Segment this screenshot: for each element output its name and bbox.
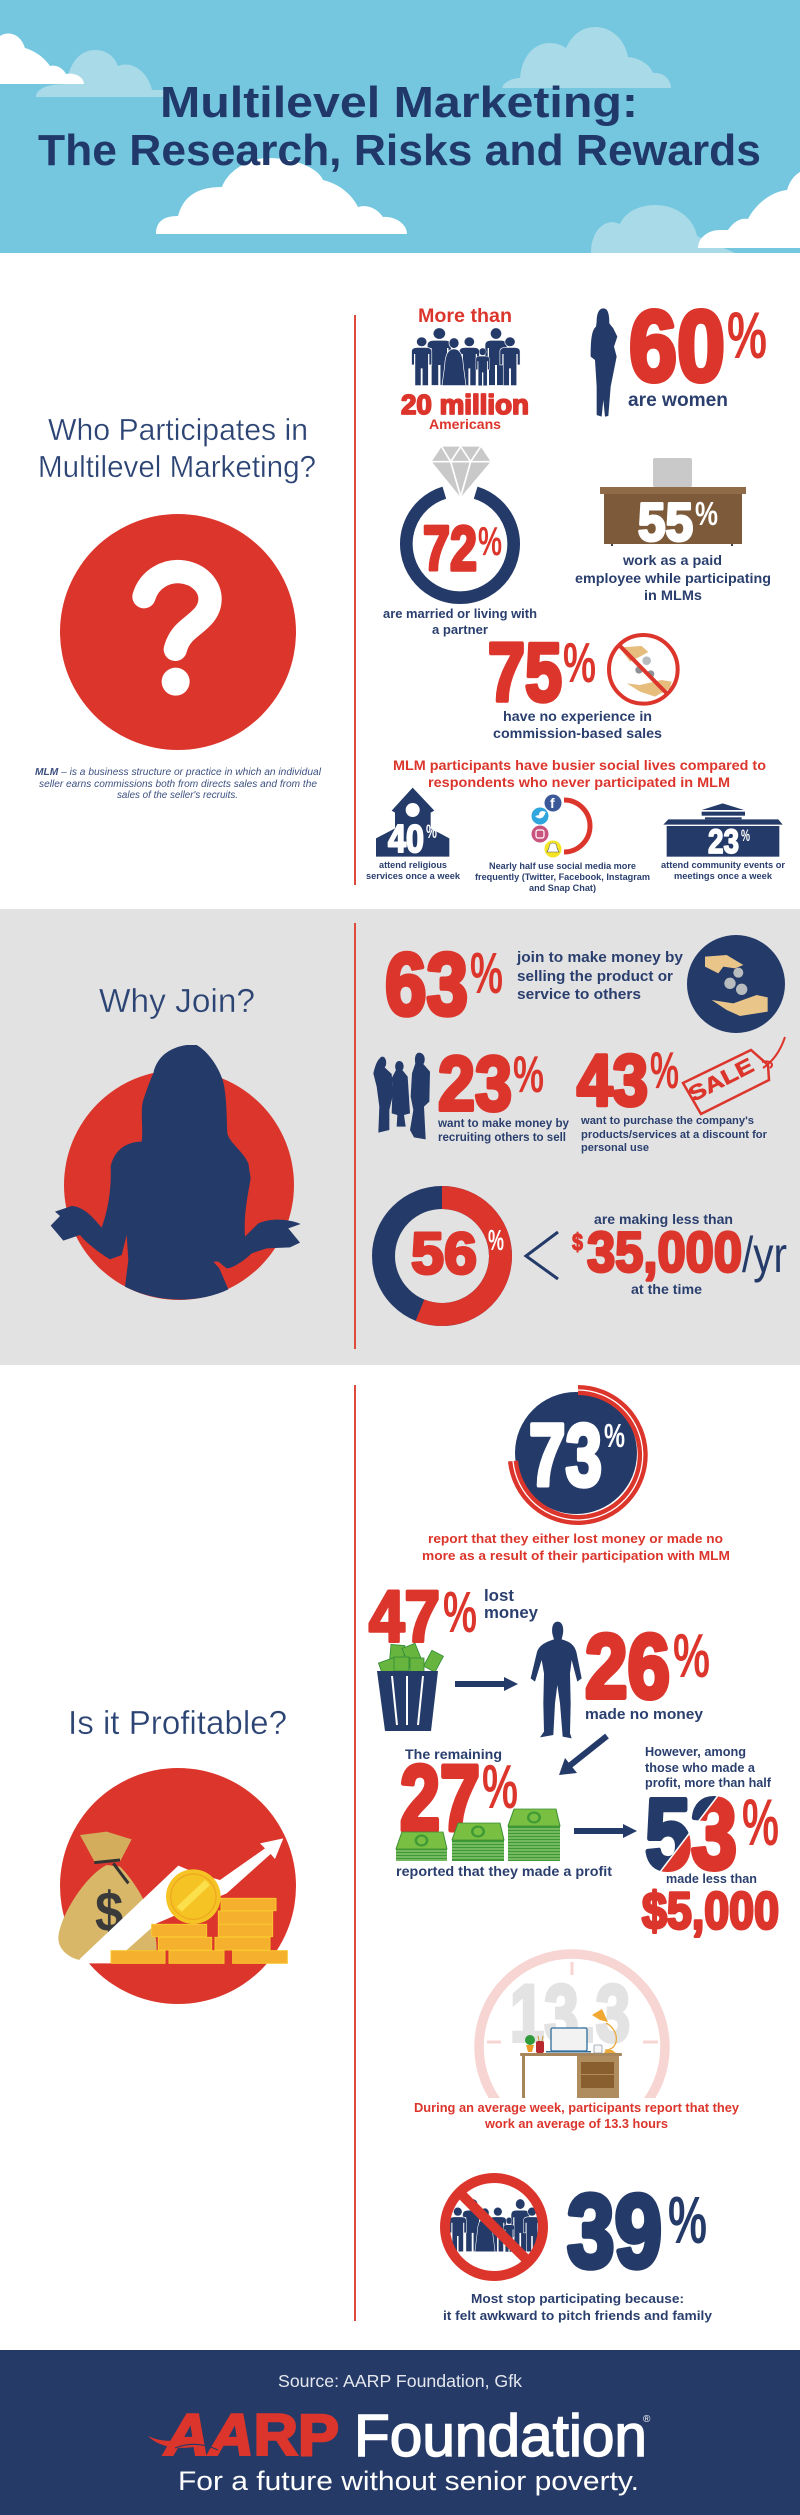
icon: diamond ring — [406, 447, 514, 598]
stat: 43% discount: products/services at a discount for — [581, 1129, 768, 1141]
stat: 60% women: % — [727, 298, 767, 372]
panel: who participates — [35, 290, 786, 893]
stat: 43% discount: % — [650, 1042, 679, 1100]
stat: 75% no experience: commission-based sales — [493, 725, 662, 741]
stat: 72% married: % — [478, 518, 502, 564]
stat: 73% lost money: more as a result of their participation with MLM — [422, 1548, 730, 1563]
icon: sale tag: SALE — [685, 1054, 758, 1106]
panel: header — [0, 0, 800, 253]
stat: 26% made no money: made no money — [585, 1706, 704, 1723]
arrow — [455, 1677, 518, 1691]
logo: AARP Foundation: AARP — [163, 2403, 339, 2468]
stat: 39% felt awkward: % — [668, 2183, 707, 2258]
subheading: busier social lives: respondents who never participated in MLM — [428, 775, 730, 790]
icon: no family group — [445, 2178, 543, 2276]
stat: social media use: and Snap Chat) — [529, 883, 596, 893]
stat: 23% recruiting: want to make money by — [437, 1116, 569, 1130]
stat: 43% discount — [577, 1037, 785, 1154]
icon: social media arc: f — [550, 795, 555, 811]
stat: 23% community events: attend community events or — [661, 860, 786, 870]
divider line — [354, 315, 356, 885]
stat: 75% no experience: have no experience in — [503, 708, 652, 724]
stat: 53% made less than $5,000: made less than — [666, 1871, 757, 1886]
stat: 27% made a profit: reported that they made a profit — [396, 1863, 612, 1879]
stat: 55% paid employee: employee while participating — [575, 571, 771, 586]
stat: 63% sell product: % — [470, 941, 503, 1006]
stat: 72% married: are married or living with — [383, 607, 537, 621]
heading: who participates: Multilevel Marketing? — [38, 449, 316, 484]
stat: 75% no experience: % — [563, 631, 596, 695]
heading: who participates: Who Participates in — [48, 412, 308, 447]
icon: social media arc — [532, 794, 590, 858]
stat: 63% sell product: 63 — [385, 935, 468, 1034]
title — [38, 78, 761, 175]
stat: 43% discount: want to purchase the company's — [580, 1115, 754, 1127]
icon: woman silhouette — [591, 308, 617, 417]
stat: 73% lost money — [422, 1390, 730, 1563]
stat: 63% sell product: selling the product or — [517, 968, 673, 985]
stat: social media use — [475, 794, 650, 893]
stat: 56% under $35,000: % — [488, 1225, 504, 1257]
stat: 20 million Americans: 20 million — [401, 389, 529, 420]
heading: who participates — [38, 412, 316, 484]
stat: 55% paid employee: 55 — [638, 494, 693, 552]
title: The Research, Risks and Rewards — [38, 126, 761, 175]
stat: 55% paid employee: work as a paid — [622, 553, 722, 568]
stat: 23% community events: 23 — [708, 823, 739, 861]
stat: 75% no experience: 75 — [488, 626, 562, 719]
stat: 39% felt awkward: it felt awkward to pitch friends and family — [443, 2308, 713, 2323]
logo: AARP Foundation: Foundation — [354, 2403, 647, 2469]
stat: 43% discount: personal use — [581, 1142, 649, 1154]
stat: 39% felt awkward — [443, 2173, 713, 2323]
stat: 63% sell product: join to make money by — [516, 949, 684, 966]
stat: 55% paid employee — [575, 458, 771, 603]
definition: MLM: MLM – is a business structure or practice in which an individual — [35, 767, 322, 778]
stat: 20 million Americans: Americans — [429, 416, 501, 432]
logo: AARP Foundation — [148, 2403, 651, 2469]
stat: 72% married — [383, 447, 537, 637]
stat: 40% religious services: 40 — [388, 818, 424, 861]
stat: 56% under $35,000: are making less than — [594, 1212, 733, 1227]
stat: 60% women: 60 — [629, 290, 725, 402]
title: Multilevel Marketing: — [160, 78, 638, 127]
icon: money bag, coins and rising arrow: $ — [95, 1882, 123, 1945]
icon: community building — [663, 803, 783, 857]
definition: MLM: sales of the seller's recruits. — [117, 790, 238, 801]
stat: 40% religious services: services once a week — [366, 871, 461, 881]
stat: 72% married: 72 — [423, 514, 477, 584]
icon: money bag, coins and rising arrow — [58, 1768, 296, 2004]
stat: 53% made less than $5,000: 53 — [645, 1778, 737, 1890]
icon: three people silhouettes — [373, 1053, 430, 1139]
stat: 47% lost money: 47 — [369, 1577, 440, 1657]
icon: question mark circle — [60, 514, 296, 750]
arrow — [574, 1824, 637, 1838]
divider line — [354, 923, 356, 1349]
icon: desk with laptop — [600, 458, 746, 546]
stat: 20 million Americans — [401, 305, 529, 432]
stat: 56% under $35,000: $ — [572, 1229, 584, 1256]
stat: 53% made less than $5,000: % — [742, 1785, 779, 1859]
icon: hands and coins — [687, 935, 785, 1033]
stat: 47% lost money: lost — [484, 1586, 514, 1605]
tagline: For a future without senior poverty. — [178, 2466, 639, 2496]
stat: 23% recruiting: recruiting others to sell — [438, 1130, 566, 1144]
stat: 27% made a profit: The remaining — [405, 1746, 502, 1762]
stat: 13.3 hours: During an average week, participants report that they — [414, 2101, 739, 2115]
stat: 23% recruiting — [373, 1041, 569, 1144]
chart: donut 56 percent — [384, 1198, 501, 1314]
cloud: right white — [698, 172, 800, 248]
stat: 26% made no money — [531, 1616, 710, 1775]
cloud: left light — [36, 50, 165, 97]
icon: man with empty pockets — [531, 1622, 582, 1738]
stat: 75% no experience — [488, 626, 678, 741]
stat: 60% women: are women — [628, 390, 728, 411]
stat: 20 million Americans: More than — [418, 305, 512, 327]
stat: 53% made less than $5,000: However, among — [645, 1744, 746, 1759]
stat: 40% religious services: % — [426, 822, 437, 843]
cloud: lower right light — [591, 205, 735, 253]
icon: clock with desk — [474, 1949, 670, 2098]
stat: 39% felt awkward: Most stop participating because: — [471, 2291, 684, 2306]
panel: why join — [0, 909, 800, 1365]
stat: 63% sell product: service to others — [517, 986, 641, 1003]
stat: 55% paid employee: in MLMs — [644, 588, 702, 603]
stat: 53% made less than $5,000: those who made a — [645, 1760, 756, 1775]
source: Source: AARP Foundation, Gfk — [278, 2371, 522, 2391]
stat: 23% recruiting: 23 — [438, 1041, 512, 1127]
stat: 53% made less than $5,000 — [642, 1744, 779, 1940]
stat: social media use: frequently (Twitter, Facebook, Instagram — [475, 872, 650, 882]
cloud: center white — [156, 158, 407, 234]
cloud: top left white — [0, 34, 84, 84]
arrow — [559, 1736, 607, 1775]
icon: trash can with money — [377, 1643, 443, 1731]
stat: 53% made less than $5,000: profit, more than half — [645, 1775, 772, 1790]
stat: social media use: Nearly half use social media more — [489, 861, 636, 871]
subheading: busier social lives — [393, 758, 766, 790]
chart: 73 percent ring — [513, 1390, 643, 1520]
stat: 73% lost money: report that they either lost money or made no — [428, 1531, 723, 1546]
stat: 56% under $35,000: at the time — [631, 1282, 703, 1297]
icon: shrugging woman — [51, 1045, 301, 1300]
icon: no sales hands — [609, 635, 678, 704]
divider line — [354, 1385, 356, 2321]
stat: 27% made a profit — [396, 1746, 637, 1879]
stat: 23% community events: % — [741, 826, 750, 845]
logo: AARP Foundation: ® — [643, 2414, 651, 2425]
stat: 43% discount: 43 — [577, 1040, 648, 1121]
icon: stacks of money — [396, 1809, 560, 1861]
panel: is it profitable — [58, 1385, 779, 2323]
stat: 55% paid employee: % — [695, 495, 718, 532]
stat: 23% community events: meetings once a week — [674, 871, 773, 881]
stat: 40% religious services — [366, 788, 461, 881]
stat: 39% felt awkward: 39 — [567, 2173, 662, 2289]
heading: is it profitable: Is it Profitable? — [68, 1705, 287, 1742]
stat: 23% recruiting: % — [513, 1046, 544, 1104]
stat: 73% lost money: 73 — [529, 1406, 602, 1505]
subheading: busier social lives: MLM participants have busier social lives compared to — [393, 758, 766, 773]
icon: group of people — [412, 328, 520, 386]
stat: 13.3 hours: work an average of 13.3 hours — [484, 2117, 668, 2131]
stat: 40% religious services: attend religious — [379, 860, 447, 870]
stat: 56% under $35,000: 56 — [411, 1222, 477, 1286]
stat: 60% women — [591, 290, 767, 417]
heading: why join: Why Join? — [99, 982, 255, 1019]
stat: 26% made no money: % — [673, 1622, 710, 1691]
icon: clock with desk: 13.3 — [510, 1969, 630, 2059]
icon: church — [376, 788, 449, 857]
stat: 56% under $35,000: 35,000 — [587, 1220, 742, 1284]
stat: 56% under $35,000 — [384, 1198, 787, 1314]
stat: 47% lost money: money — [484, 1603, 539, 1622]
stat: 72% married: a partner — [432, 623, 488, 637]
stat: 47% lost money: % — [443, 1580, 477, 1645]
stat: 13.3 hours — [414, 1954, 739, 2140]
definition: MLM: seller earns commissions both from directs sales and from the — [39, 779, 317, 790]
icon: sale tag — [683, 1037, 785, 1114]
stat: 27% made a profit: 27 — [400, 1746, 480, 1850]
icon: less than — [526, 1232, 558, 1279]
stat: 53% made less than $5,000: $5,000 — [642, 1882, 779, 1940]
stat: 47% lost money — [369, 1577, 539, 1731]
stat: 63% sell product — [385, 935, 785, 1034]
stat: 27% made a profit: % — [482, 1753, 518, 1822]
panel: footer — [0, 2350, 800, 2515]
stat: 26% made no money: 26 — [585, 1616, 670, 1718]
cloud: right light — [502, 27, 671, 88]
stat: 53% made less than $5,000: 53 — [645, 1778, 737, 1890]
definition: MLM — [35, 767, 322, 801]
stat: 56% under $35,000: /yr — [742, 1227, 787, 1283]
stat: 23% community events — [661, 803, 786, 881]
stat: 73% lost money: % — [604, 1417, 625, 1454]
